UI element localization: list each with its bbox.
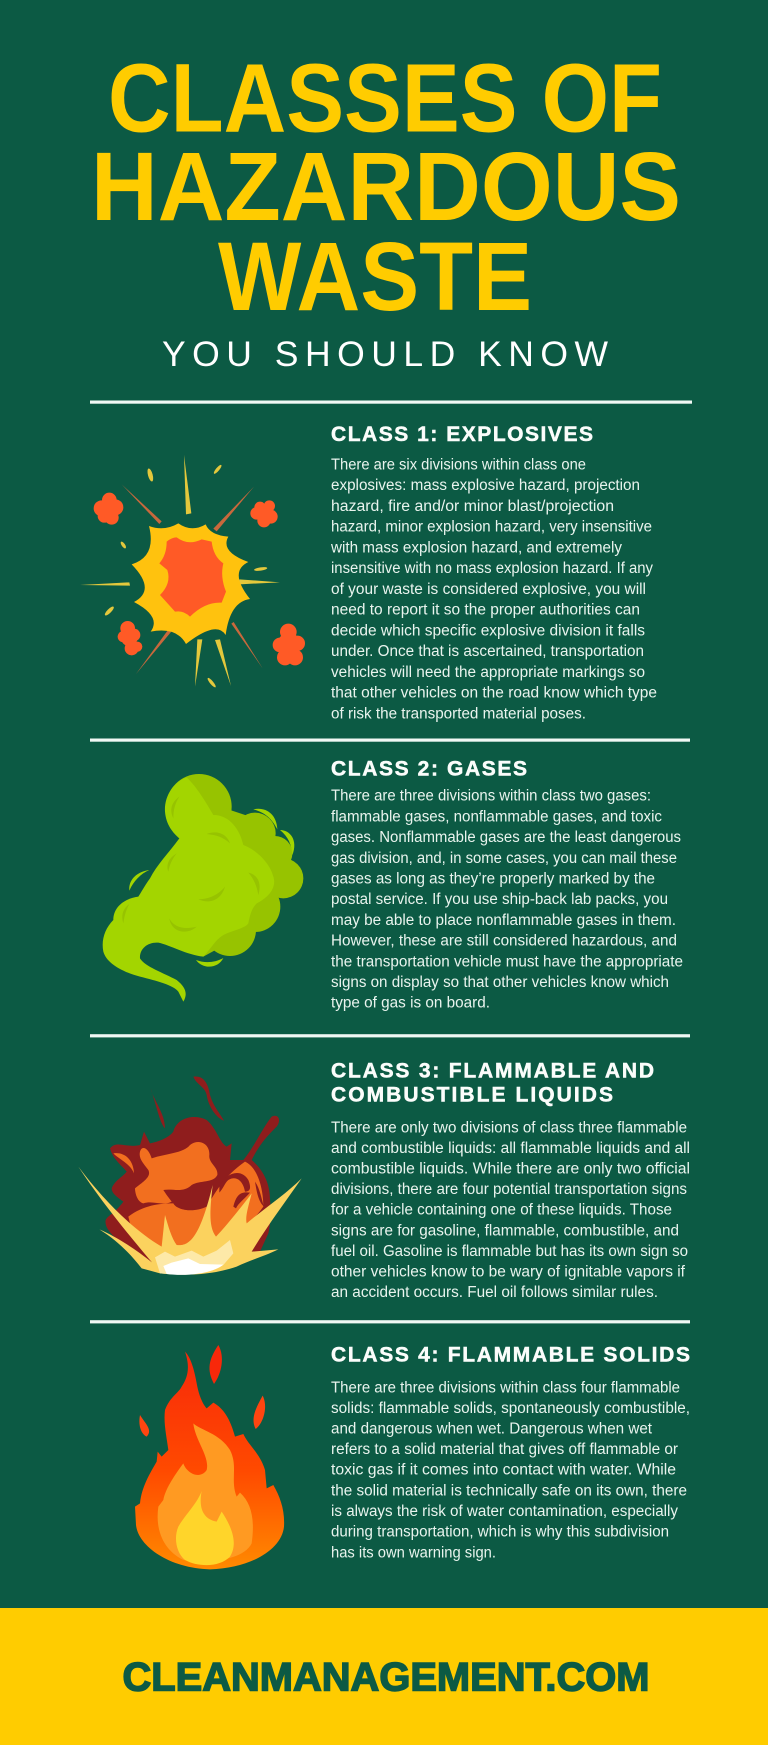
body text: class 2	[331, 788, 683, 1012]
body text: class 2: gases. Nonflammable gases are the least dangerous	[331, 829, 681, 846]
body text: class 2: postal service. If you use ship-back lab packs, you	[331, 891, 668, 908]
body text: class 2: gases as long as they’re properly marked by the	[331, 870, 655, 888]
body text: class 2: gas division, and, in some cases, you can mail these	[331, 850, 677, 867]
body text: class 1: with mass explosion hazard, and extremely	[330, 539, 622, 556]
body text: class 4: toxic gas if it comes into contact with water. While	[331, 1462, 676, 1479]
body text: class 4: and dangerous when wet. Dangerous when wet	[331, 1420, 653, 1438]
body text: class 3: other vehicles know to be wary of ignitable vapors if	[331, 1264, 686, 1280]
title: CLASSES OF	[108, 44, 662, 152]
subtitle: YOU SHOULD KNOW	[162, 334, 608, 374]
body text: class 2: may be able to place nonflammable gases in them.	[331, 912, 676, 929]
body text: class 1: of your waste is considered explosive, you will	[331, 581, 646, 598]
body text: class 1: decide which specific explosive division it falls	[331, 622, 645, 639]
body text: class 3: fuel oil. Gasoline is flammable but has its own sign so	[331, 1243, 688, 1260]
body text: class 4: refers to a solid material that gives off flammable or	[331, 1441, 678, 1458]
footer url: CLEANMANAGEMENT.COM	[122, 1656, 650, 1700]
heading: class 3: CLASS 3: FLAMMABLE AND	[331, 1059, 654, 1082]
body text: class 3: an accident occurs. Fuel oil follows similar rules.	[331, 1284, 658, 1301]
body text: class 1: need to report it so the proper authorities can	[331, 602, 640, 619]
body text: class 4: solids: flammable solids, spontaneously combustible,	[331, 1400, 690, 1417]
body text: class 1: hazard, minor explosion hazard, very insensitive	[331, 519, 652, 536]
body text: class 3: combustible liquids. While there are only two official	[331, 1160, 690, 1178]
body text: class 4: is always the risk of water contamination, especially	[331, 1503, 678, 1520]
body text: class 1: hazard, fire and/or minor blast/projection	[331, 498, 614, 515]
body text: class 1: There are six divisions within class one	[331, 456, 586, 473]
body text: class 3: and combustible liquids: all flammable liquids and all	[331, 1140, 690, 1157]
body text: class 2: type of gas is on board.	[331, 995, 490, 1012]
body text: class 2: flammable gases, nonflammable gases, and toxic	[331, 808, 662, 825]
body text: class 4: the solid material is technically safe on its own, there	[331, 1482, 687, 1499]
heading: class 3: COMBUSTIBLE LIQUIDS	[331, 1084, 613, 1107]
body text: class 1	[330, 456, 657, 722]
body text: class 3: signs are for gasoline, flammable, combustible, and	[331, 1222, 679, 1239]
title	[91, 44, 681, 331]
title: WASTE	[218, 222, 532, 331]
title: HAZARDOUS	[91, 132, 681, 241]
heading: class 3	[331, 1059, 654, 1107]
body text: class 1: vehicles will need the appropriate markings so	[331, 664, 645, 681]
heading: class 4: CLASS 4: FLAMMABLE SOLIDS	[331, 1344, 690, 1367]
panel: class 1 explosives	[80, 423, 657, 722]
body text: class 2: the transportation vehicle must have the appropriate	[331, 953, 683, 970]
body text: class 1: that other vehicles on the road know which type	[331, 685, 657, 702]
body text: class 2: signs on display so that other vehicles know which	[331, 974, 669, 991]
panel: class 4 flammable solids	[135, 1344, 690, 1569]
body text: class 2: There are three divisions within class two gases:	[331, 788, 651, 805]
body text: class 3: for a vehicle containing one of these liquids. Those	[331, 1202, 672, 1219]
body text: class 4	[331, 1379, 690, 1561]
icon: explosion	[80, 455, 305, 688]
body text: class 3: divisions, there are four potential transportation signs	[331, 1181, 687, 1198]
icon: green gas cloud	[103, 774, 303, 1002]
panel: class 3 flammable and combustible liquids	[78, 1059, 690, 1301]
body text: class 4: during transportation, which is why this subdivision	[331, 1524, 669, 1540]
heading: class 1: CLASS 1: EXPLOSIVES	[331, 423, 593, 446]
body text: class 3: There are only two divisions of class three flammable	[331, 1119, 687, 1136]
body text: class 1: explosives: mass explosive hazard, projection	[331, 477, 640, 494]
icon: fiery explosion	[78, 1076, 302, 1275]
body text: class 1: of risk the transported material poses.	[331, 705, 586, 722]
footer band	[0, 1608, 768, 1745]
body text: class 4: There are three divisions within class four flammable	[331, 1379, 680, 1396]
body text: class 1: under. Once that is ascertained, transportation	[331, 643, 644, 660]
body text: class 2: However, these are still considered hazardous, and	[331, 933, 677, 950]
panel: class 2 gases	[103, 758, 683, 1012]
icon: flame	[135, 1345, 284, 1569]
body text: class 3	[331, 1119, 690, 1301]
heading: class 2: CLASS 2: GASES	[331, 758, 527, 780]
body text: class 4: has its own warning sign.	[331, 1544, 496, 1561]
body text: class 1: insensitive with no mass explosion hazard. If any	[331, 560, 653, 577]
